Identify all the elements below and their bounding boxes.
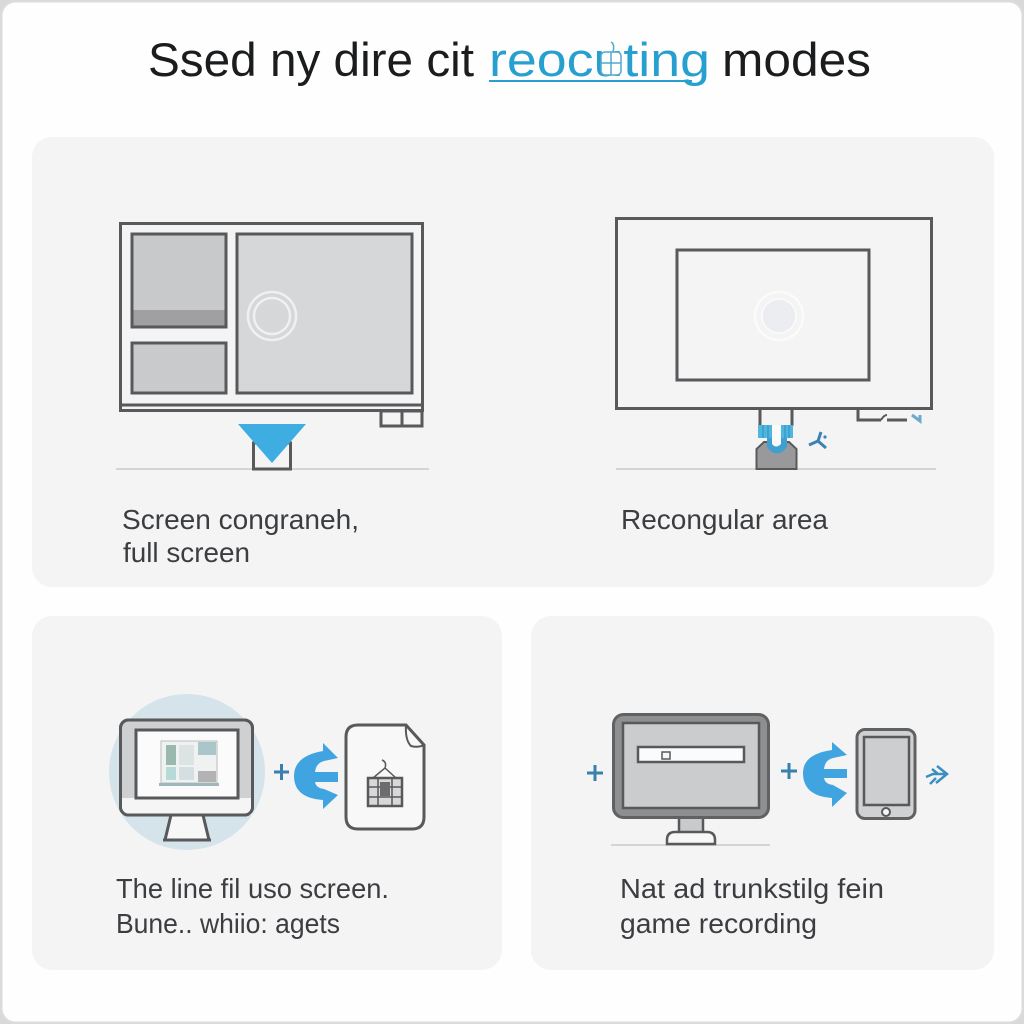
panel: game recording xyxy=(531,616,994,970)
baseline xyxy=(116,468,429,470)
title glyph overlay xyxy=(601,42,621,75)
icon: small blue arrow xyxy=(926,766,947,784)
label: screen: full screen xyxy=(123,537,250,568)
icon: blue clamp on stand xyxy=(756,409,827,469)
icon: split screen monitor xyxy=(120,224,423,426)
icon: plus left xyxy=(587,765,603,781)
label: window: Bune.. whiio: agets xyxy=(116,908,340,939)
label: window: The line fil uso screen. xyxy=(116,873,389,904)
panel: full screen xyxy=(32,137,994,587)
icon: blue arrows xyxy=(294,743,338,809)
mini window xyxy=(159,741,219,786)
icon: plus middle xyxy=(781,763,797,779)
label: game recording xyxy=(620,873,884,939)
icon: phone xyxy=(857,730,915,818)
icon: blue circle backdrop xyxy=(109,694,265,850)
title xyxy=(148,33,871,86)
icon: desktop monitor xyxy=(120,720,252,840)
label: game recording: Nat ad trunkstilg fein xyxy=(620,873,884,904)
label: screen: Screen congraneh, xyxy=(122,504,359,535)
baseline xyxy=(616,468,936,470)
title: Ssed ny dire cit xyxy=(148,33,474,86)
icon: blue triangle on stand xyxy=(238,424,306,469)
label: screen xyxy=(122,504,359,568)
baseline xyxy=(611,844,770,846)
title: reocuting xyxy=(489,33,710,86)
icon: rectangular area monitor xyxy=(616,218,932,421)
label: rectangular area: Recongular area xyxy=(621,504,828,535)
label: game recording: game recording xyxy=(620,908,817,939)
icon: game monitor xyxy=(614,714,768,844)
title: modes xyxy=(722,33,871,86)
icon: blue arrows xyxy=(803,742,847,807)
panel: window recording xyxy=(32,616,502,970)
icon: plus xyxy=(274,764,289,780)
label: window xyxy=(116,873,389,939)
icon: document with keyboard xyxy=(346,725,424,829)
